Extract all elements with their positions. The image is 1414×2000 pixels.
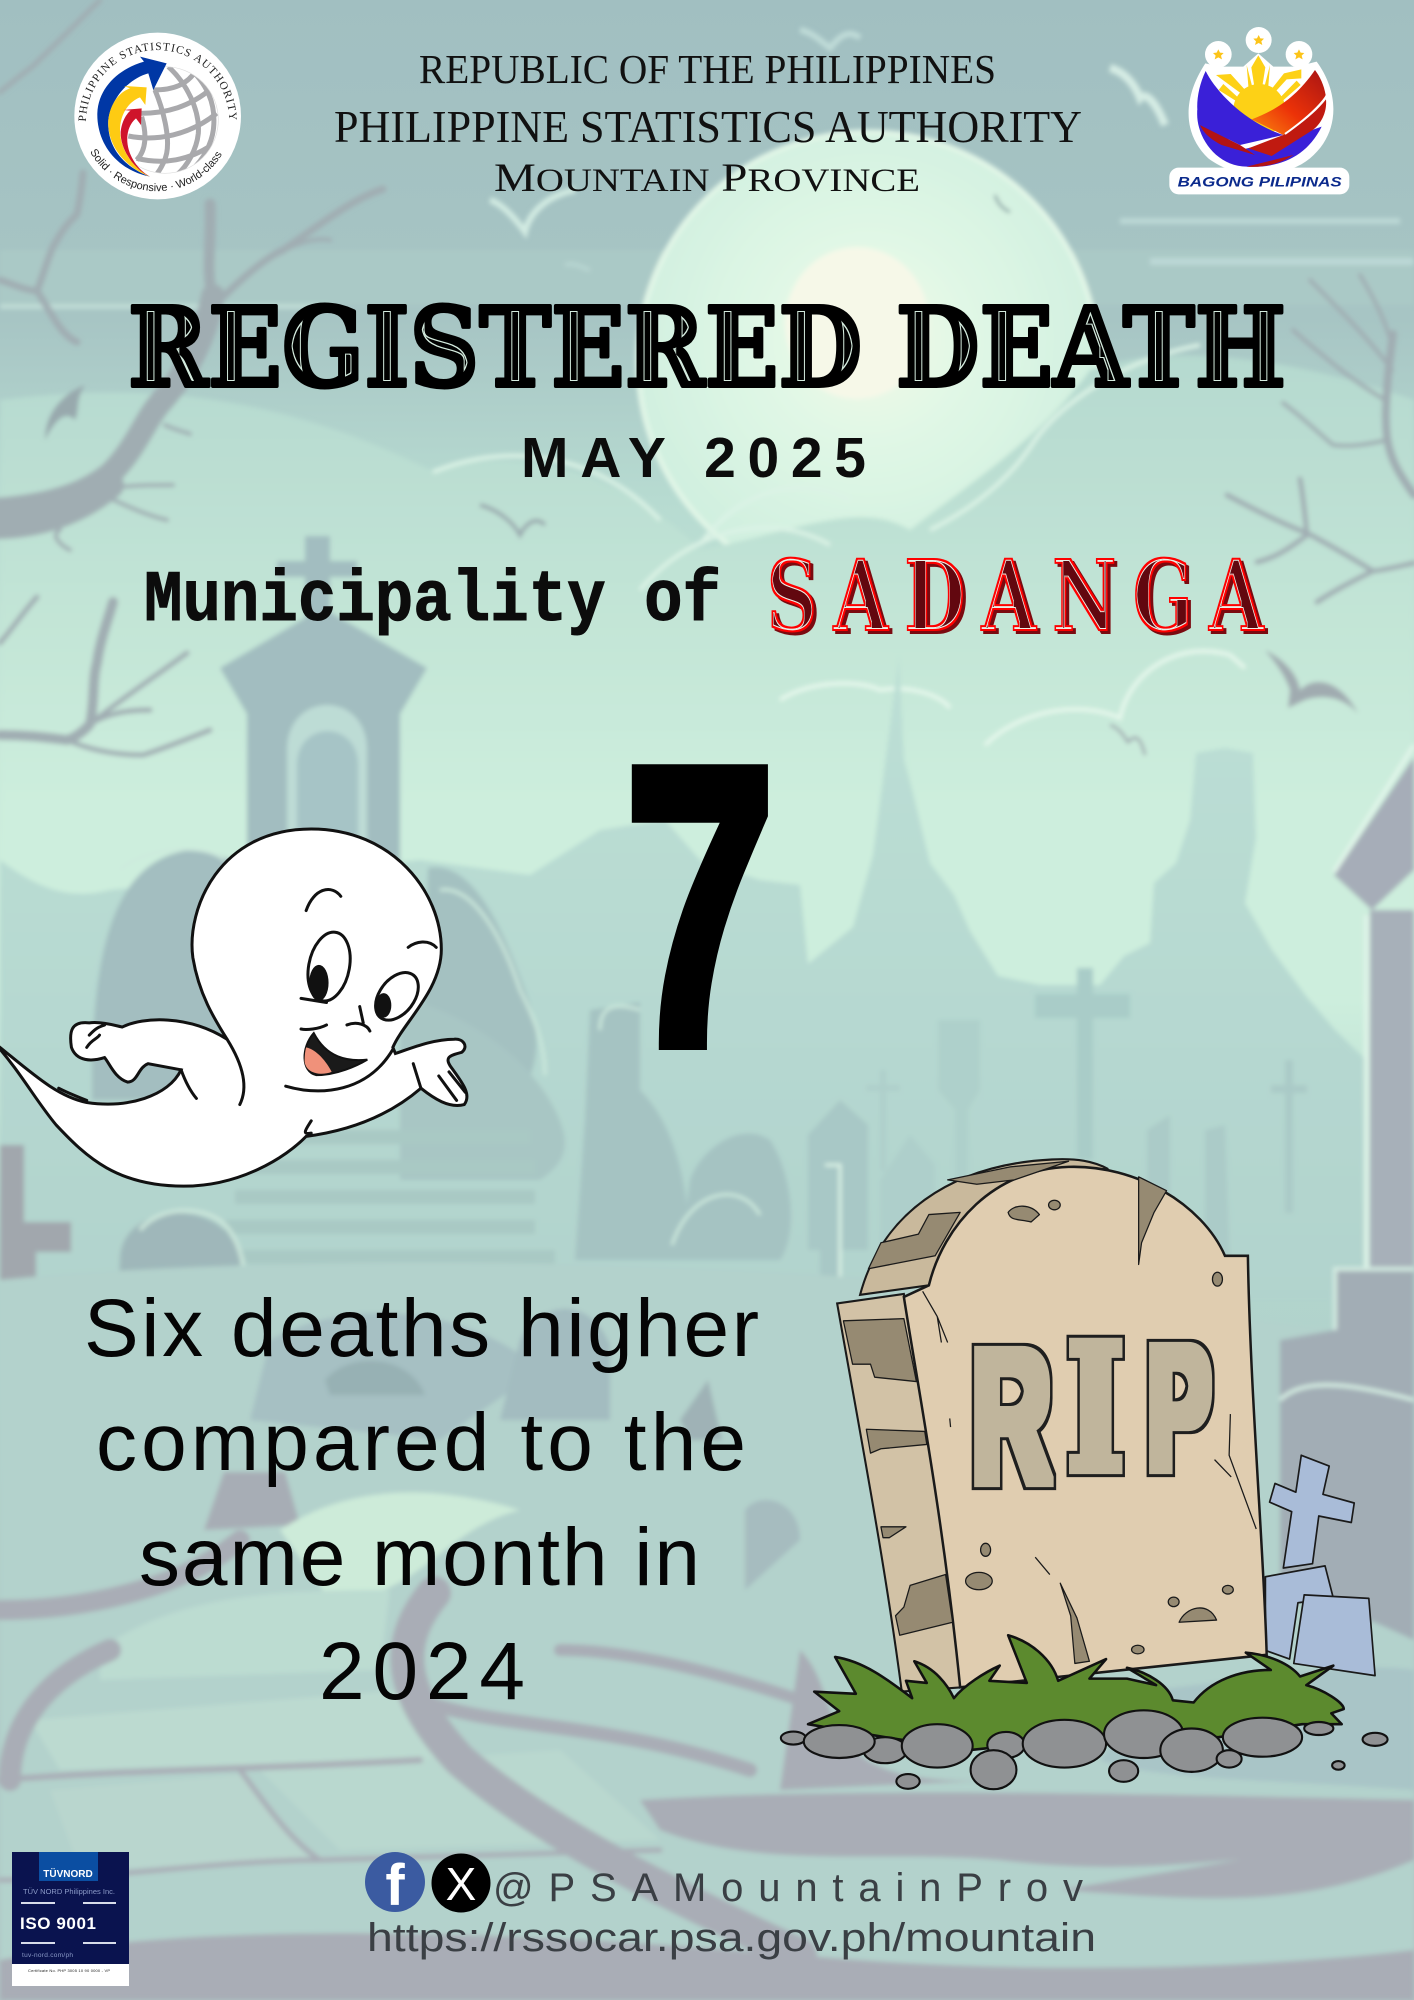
small blue cross and base [1265, 1455, 1375, 1676]
ground base [0, 1262, 1414, 2000]
body text: comparison: compared to the [96, 1397, 746, 1488]
badge: ISO 9001 certification: ISO 9001 [20, 1914, 96, 1933]
badge: ISO 9001 certification: TÜV NORD Philippines Inc. [23, 1887, 115, 1896]
body text: comparison: same month in [139, 1512, 700, 1603]
body text: comparison [84, 1283, 759, 1717]
front clouds [0, 356, 1414, 1000]
icon: facebook [365, 1852, 425, 1918]
icon: X: X [446, 1858, 476, 1910]
small distant crosses and stones [1035, 968, 1130, 1160]
illustration: friendly ghost [0, 829, 467, 1186]
logo: Philippine Statistics Authority seal: PHILIPPINE STATISTICS AUTHORITY [78, 42, 237, 122]
title: REGISTERED DEATH [128, 283, 1286, 412]
carved RIP letters: R [972, 1310, 1051, 1523]
distant silhouettes [0, 656, 1366, 1300]
logo: Philippine Statistics Authority seal: Solid · Responsive · World-class [91, 149, 222, 192]
stone face [904, 1167, 1267, 1687]
birds [1265, 650, 1358, 713]
badge: ISO 9001 certification [12, 1852, 129, 1986]
sky bands [0, 250, 1414, 305]
right mausoleum [1334, 757, 1414, 910]
carved RIP letters [972, 1307, 1210, 1523]
big number: deaths: 7 [625, 685, 775, 1127]
carved RIP letters: I [1069, 1307, 1123, 1511]
icon: X [432, 1854, 490, 1912]
social handle: @PSAMountainProv [493, 1866, 1083, 1910]
municipality name: SADANGA [766, 537, 1265, 655]
badge: ISO 9001 certification: TÜVNORD [43, 1867, 93, 1880]
body text: comparison: Six deaths higher [84, 1283, 759, 1374]
trees [0, 0, 1414, 755]
stone damage [843, 1161, 1233, 1663]
subtitle: month: MAY 2025 [521, 426, 866, 490]
header: agency name: PHILIPPINE STATISTICS AUTHORITY [334, 101, 1082, 152]
illustration: RIP tombstone [781, 1159, 1388, 1789]
logo: Bagong Pilipinas [1169, 27, 1349, 194]
rocks [781, 1710, 1388, 1789]
left graves [0, 1145, 71, 1490]
stairs [215, 1130, 555, 1264]
body text: comparison: 2024 [319, 1626, 525, 1717]
website url: https://rssocar.psa.gov.ph/mountain [367, 1916, 1096, 1960]
ground shadows [0, 1540, 800, 1955]
ground light tiles [280, 1493, 520, 1600]
bottom grey washes [640, 1792, 1414, 1867]
clouds lower [780, 651, 1245, 745]
carved RIP letters: P [1148, 1308, 1210, 1507]
logo: Bagong Pilipinas: BAGONG PILIPINAS [1178, 175, 1342, 190]
chapel [220, 536, 427, 900]
logo: Philippine Statistics Authority seal [74, 32, 241, 200]
stone side [837, 1294, 962, 1692]
badge: ISO 9001 certification: tuv-nord.com/ph [22, 1952, 73, 1959]
icon: facebook: f [385, 1853, 405, 1918]
grass [808, 1635, 1344, 1750]
header: agency name: MOUNTAIN PROVINCE [494, 155, 920, 200]
right grey block [1280, 1269, 1414, 1640]
municipality label: Municipality of [144, 560, 721, 642]
moon [638, 132, 1098, 592]
header: agency name: REPUBLIC OF THE PHILIPPINES [419, 46, 996, 92]
badge: ISO 9001 certification: Certificate No. PHP 3005 10 90 0000 - VP [28, 1968, 110, 1973]
header: agency name [334, 46, 1082, 200]
bushes [92, 850, 270, 1100]
